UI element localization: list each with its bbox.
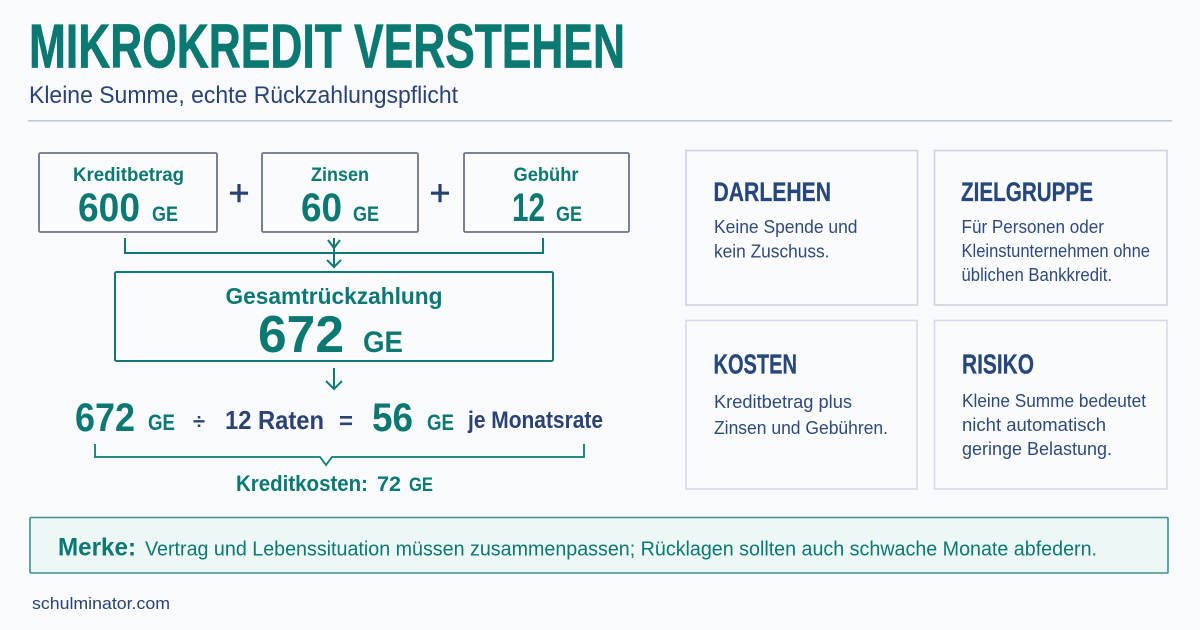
- bracket: [95, 444, 584, 465]
- subtitle: Kleine Summe, echte Rückzahlungspflicht: [29, 82, 458, 109]
- card: Risiko: Kleine Summe bedeutet: [962, 391, 1146, 411]
- card: Darlehen: [686, 150, 918, 305]
- plus sign: +: [429, 172, 451, 213]
- card: Risiko: RISIKO: [962, 348, 1034, 380]
- formula: monthly rate: GE: [148, 410, 175, 435]
- card: Zielgruppe: ZIELGRUPPE: [961, 177, 1093, 207]
- callout: Merke: [30, 518, 1168, 573]
- card: Kosten: Zinsen und Gebühren.: [714, 418, 888, 438]
- formula: monthly rate: 672: [75, 396, 135, 440]
- box: Zinsen: Zinsen: [311, 164, 369, 186]
- box: Gesamtrückzahlung: [115, 272, 553, 364]
- formula: monthly rate: =: [339, 408, 353, 435]
- callout: Merke: Merke:: [58, 534, 136, 562]
- box: Gebühr: GE: [556, 203, 582, 226]
- credit cost label: Kreditkosten:: [236, 471, 368, 496]
- box: Zinsen: 60: [301, 186, 342, 230]
- card: Darlehen: kein Zuschuss.: [714, 242, 830, 262]
- box: Gesamtrückzahlung: Gesamtrückzahlung: [226, 283, 442, 309]
- callout: Merke: Vertrag und Lebenssituation müssen zusammenpassen; Rücklagen sollten auch schwache Monate abfedern.: [145, 538, 1097, 560]
- card: Darlehen: DARLEHEN: [714, 177, 831, 207]
- box: Gebühr: [464, 153, 629, 232]
- box: Gebühr: Gebühr: [514, 164, 579, 186]
- footer: schulminator.com: [32, 594, 170, 613]
- box: Gesamtrückzahlung: 672: [258, 306, 344, 364]
- card: Zielgruppe: Für Personen oder: [962, 217, 1104, 237]
- connector arrows: [125, 238, 543, 268]
- card: Darlehen: Keine Spende und: [714, 217, 858, 237]
- box: Zinsen: GE: [353, 203, 379, 226]
- title: MIKROKREDIT VERSTEHEN: [29, 12, 625, 82]
- box: Kreditbetrag: GE: [152, 203, 178, 226]
- arrow down: [326, 368, 342, 389]
- formula: monthly rate: GE: [427, 410, 454, 435]
- box: Zinsen: [262, 153, 418, 232]
- formula: monthly rate: [75, 396, 603, 440]
- formula: monthly rate: ÷: [193, 409, 205, 434]
- card: Risiko: nicht automatisch: [962, 415, 1106, 435]
- formula: monthly rate: 56: [372, 396, 413, 440]
- card: Risiko: geringe Belastung.: [962, 439, 1112, 459]
- box: Kreditbetrag: 600: [78, 186, 140, 230]
- formula: monthly rate: je Monatsrate: [467, 407, 603, 434]
- box: Kreditbetrag: Kreditbetrag: [73, 164, 184, 186]
- box: Gesamtrückzahlung: GE: [363, 326, 403, 359]
- card: Risiko: [934, 320, 1167, 489]
- card: Zielgruppe: [934, 150, 1167, 305]
- card: Zielgruppe: Kleinstunternehmen ohne: [962, 241, 1150, 261]
- card: Kosten: [686, 320, 917, 489]
- card: Kosten: KOSTEN: [714, 348, 797, 380]
- box: Gebühr: 12: [512, 186, 545, 230]
- credit cost label: GE: [409, 475, 433, 496]
- card: Zielgruppe: üblichen Bankkredit.: [962, 265, 1112, 285]
- credit cost label: 72: [377, 473, 401, 496]
- formula: monthly rate: 12 Raten: [225, 405, 324, 435]
- plus sign: +: [228, 172, 250, 213]
- box: Kreditbetrag: [39, 153, 217, 232]
- card: Kosten: Kreditbetrag plus: [714, 392, 852, 412]
